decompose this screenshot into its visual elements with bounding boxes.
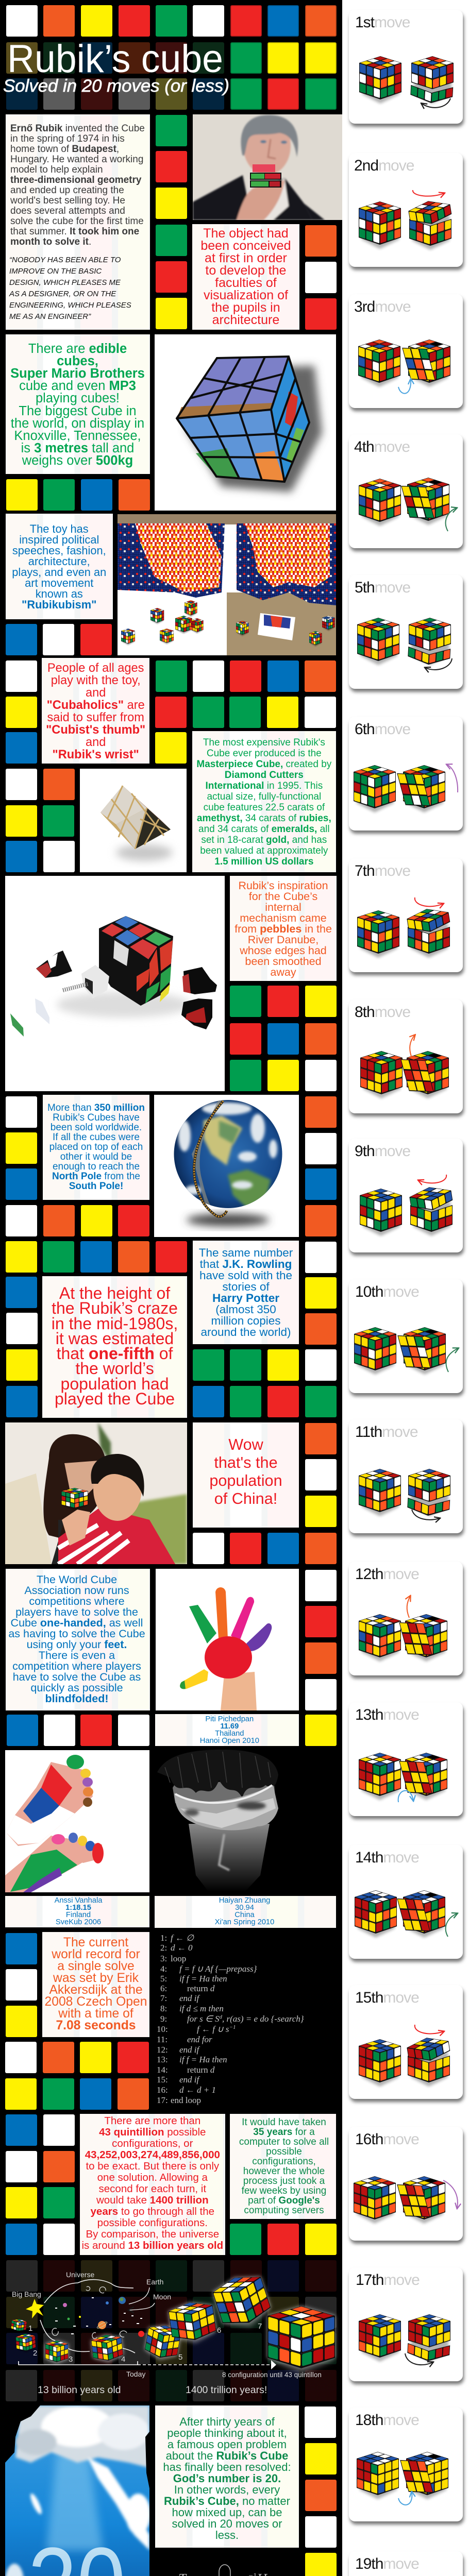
panel: 35 years of computing: computer to solve all	[239, 2137, 329, 2147]
algorithm pseudocode: 16:	[157, 2085, 168, 2095]
card: 3rd move: 3rdmove	[354, 298, 411, 315]
panel: world record: a single solve	[57, 1959, 135, 1973]
text block: quote	[9, 256, 131, 321]
panel: God's number: Rubik’s Cube, no matter	[164, 2495, 290, 2507]
algorithm pseudocode	[157, 1933, 304, 2105]
panel: edible cubes: weighs over 500kg	[22, 453, 133, 468]
panel: 350 million sold: enough to reach the	[53, 1161, 140, 1172]
algorithm pseudocode: 13:	[157, 2055, 168, 2064]
panel: Rubikubism: known as	[36, 587, 83, 600]
panel: world record	[42, 1932, 149, 2037]
panel: 43 quintillion: possible configurations.	[97, 2217, 208, 2229]
card: 5th move	[349, 575, 463, 689]
panel: all ages: and	[86, 736, 106, 749]
card: 13th move: 13thmove	[355, 1706, 419, 1723]
panel: all ages	[42, 658, 149, 764]
panel: object conceived: faculties of	[215, 276, 277, 290]
panel: one-fifth played: At the height of	[59, 1284, 170, 1302]
panel: Rubikubism: plays, and even an	[12, 566, 106, 579]
algorithm pseudocode: 15:	[157, 2075, 168, 2084]
panel: Harry Potter comparison: The same number	[199, 1246, 293, 1259]
panel: object conceived: architecture	[212, 313, 279, 327]
text block: intro: in the spring of 1974 in his	[10, 133, 125, 144]
tile grid	[5, 5, 337, 2576]
photo: painted hand	[156, 1569, 299, 1710]
algorithm pseudocode: end for	[187, 2035, 212, 2044]
panel: masterpiece cube: Diamond Cutters	[225, 770, 304, 781]
panel: World Cube Association: players have to solve the	[15, 1606, 138, 1618]
panel: God's number: In other words, every	[174, 2483, 280, 2496]
panel: edible cubes: is 3 metres tall and	[21, 441, 134, 455]
panel: World Cube Association: have to solve the Cube as	[13, 1671, 141, 1683]
card: 9th move: 9thmove	[355, 1143, 410, 1160]
card: 12th move	[349, 1562, 463, 1675]
algorithm pseudocode: end if	[179, 2045, 200, 2055]
panel: Harry Potter comparison: stories of	[222, 1280, 270, 1293]
algorithm pseudocode: 8:	[160, 2004, 167, 2013]
panel: 43 quintillion: to be exact. But there is only	[86, 2160, 219, 2172]
panel: 35 years of computing: computing servers	[244, 2205, 324, 2216]
text block: intro: and ended up creating the	[10, 185, 124, 196]
panel: masterpiece cube: amethyst, 34 carats of rubies,	[197, 813, 331, 824]
panel: all ages: "Cubist's thumb"	[46, 723, 145, 737]
algorithm pseudocode: for s ∈ S	[187, 2014, 220, 2024]
panel: pebbles inspiration: from pebbles in the	[234, 922, 332, 935]
panel: 43 quintillion: By comparison, the universe	[86, 2228, 219, 2240]
panel: Harry Potter comparison	[193, 1241, 299, 1344]
panel: world record: Akkersdijk at the	[49, 1982, 143, 1997]
card: 17th move: 17thmove	[356, 2272, 420, 2289]
panel: World Cube Association: quickly as possible	[30, 1682, 123, 1694]
panel: one-fifth played: in the mid-1980s,	[52, 1314, 178, 1333]
panel: World Cube Association	[5, 1569, 149, 1710]
panel: edible cubes: The biggest Cube in	[19, 404, 137, 418]
panel: edible cubes: There are edible	[28, 342, 127, 356]
panel: masterpiece cube: and 34 carats of emeralds, all	[198, 824, 330, 835]
panel: God's number: God’s number is 20.	[173, 2472, 281, 2485]
algorithm pseudocode: d ← 0	[171, 1943, 193, 1953]
panel: 35 years of computing	[230, 2114, 336, 2219]
panel: Harry Potter comparison: (almost 350	[215, 1303, 276, 1316]
panel: World Cube Association: Association now runs	[24, 1584, 129, 1597]
panel: Harry Potter comparison: Harry Potter	[212, 1292, 279, 1304]
panel: 35 years of computing: It would have taken	[242, 2117, 326, 2128]
panel: edible cubes: Knoxville, Tennessee,	[14, 429, 141, 443]
algorithm pseudocode: 17:	[157, 2095, 168, 2105]
text block: intro: month to solve it.	[10, 236, 91, 247]
algorithm pseudocode: 12:	[157, 2045, 168, 2055]
panel: world record: was set by Erik	[53, 1971, 139, 1985]
panel: population of China: population	[209, 1472, 282, 1489]
panel: God's number: people thinking about it,	[167, 2427, 287, 2439]
caption: Haiyan Zhuang: China	[234, 1911, 255, 1919]
algorithm pseudocode: 2:	[160, 1943, 167, 1953]
panel: Rubikubism	[5, 514, 113, 619]
panel: pebbles inspiration	[230, 876, 337, 981]
timeline: universe age versus cube configurations: Moon	[153, 2293, 171, 2301]
text block: intro: world's best selling toy. He	[10, 195, 125, 206]
timeline: universe age versus cube configurations: 2	[33, 2349, 37, 2358]
panel: 350 million sold: North Pole from the	[52, 1171, 140, 1182]
text block: intro: Hungary. He wanted a working	[10, 154, 143, 165]
panel: population of China	[193, 1422, 299, 1528]
card: 17th move	[349, 2267, 463, 2381]
photo: blindfolded man	[157, 1750, 278, 1888]
panel: pebbles inspiration: River Danube,	[248, 934, 319, 946]
panel: object conceived: to develop the	[205, 263, 286, 278]
panel: 350 million sold: South Pole!	[69, 1181, 123, 1192]
text block: quote: “NOBODY HAS BEEN ABLE TO	[9, 256, 121, 264]
card: 18th move	[349, 2408, 463, 2521]
panel: pebbles inspiration: been smoothed	[245, 955, 322, 968]
panel: object conceived: The object had	[203, 226, 289, 241]
panel: 350 million sold: More than 350 million	[47, 1103, 145, 1113]
card: 8th move	[349, 999, 463, 1113]
timeline: universe age versus cube configurations: 1400 trillion years!	[186, 2384, 267, 2396]
panel: masterpiece cube: cube features 22.5 carats of	[204, 802, 325, 813]
panel: 43 quintillion: 43 quintillion possible	[99, 2126, 206, 2138]
timeline: universe age versus cube configurations: 8 configuration until 43 quintillon	[222, 2371, 322, 2379]
algorithm pseudocode: if d ≤ m then	[179, 2004, 224, 2013]
algorithm pseudocode: 5:	[160, 1974, 167, 1984]
card: 4th move	[349, 434, 463, 548]
text block: quote: AS A DESIGNER, OR ON THE	[9, 290, 116, 298]
algorithm pseudocode: 9:	[160, 2014, 167, 2024]
panel: masterpiece cube: actual size, fully-functional	[207, 791, 321, 802]
panel: 35 years of computing: configurations,	[252, 2156, 316, 2167]
card: 2nd move: 2ndmove	[354, 157, 414, 174]
panel: God's number: a famous open problem	[167, 2438, 287, 2451]
panel: 43 quintillion: configurations, or	[112, 2138, 193, 2149]
caption: Haiyan Zhuang: Xi'an Spring 2010	[215, 1918, 274, 1926]
panel: one-fifth played	[42, 1276, 187, 1418]
card: 16th move: 16thmove	[355, 2131, 419, 2148]
panel: God's number: After thirty years of	[179, 2415, 275, 2428]
caption: Anssi Vanhala	[5, 1896, 149, 1927]
panel: pebbles inspiration: whose edges had	[240, 944, 327, 956]
text block: intro: does several attempts and	[10, 206, 125, 216]
algorithm pseudocode: , r(as) = e do {-search}	[222, 2014, 304, 2024]
panel: one-fifth played: the Rubik’s craze	[52, 1299, 178, 1317]
panel: pebbles inspiration: for the Cube’s	[249, 890, 317, 903]
card: 10th move: 10thmove	[355, 1283, 419, 1300]
card: 16th move	[349, 2127, 463, 2241]
panel: 350 million sold: If all the cubes were	[53, 1132, 140, 1143]
panel: masterpiece cube: set in 18-carat gold, and has	[201, 835, 327, 845]
timeline: universe age versus cube configurations: Earth	[146, 2278, 163, 2286]
text block: intro: that summer. It took him one	[10, 226, 139, 237]
card: 14th move	[349, 1845, 463, 1959]
panel: masterpiece cube	[192, 731, 336, 872]
panel: world record: 2008 Czech Open	[44, 1995, 147, 2008]
panel: 35 years of computing: process just took a	[243, 2176, 325, 2187]
panel: God's number	[155, 2405, 299, 2548]
text block: quote: IMPROVE ON THE BASIC	[9, 267, 102, 276]
card: 12th move: 12thmove	[355, 1566, 419, 1583]
panel: Harry Potter comparison: around the world)	[200, 1326, 291, 1338]
panel: all ages: "Cubaholics" are	[47, 699, 145, 712]
panel: 35 years of computing: part of Google's	[248, 2195, 320, 2206]
timeline: universe age versus cube configurations: 4	[121, 2355, 125, 2364]
algorithm pseudocode: d	[220, 2014, 223, 2020]
card: 7th move: 7thmove	[355, 862, 410, 879]
timeline: universe age versus cube configurations	[11, 2270, 335, 2396]
panel: one-fifth played: played the Cube	[55, 1389, 175, 1408]
panel: Erno Rubik intro	[5, 114, 149, 330]
panel: one-fifth played: that one-fifth of	[57, 1344, 173, 1363]
card: 1st move	[349, 10, 463, 124]
text block: intro: home town of Budapest,	[10, 144, 119, 155]
black left column background	[0, 0, 342, 2576]
timeline: universe age versus cube configurations: Big Bang	[12, 2290, 41, 2298]
panel: world record: world record for	[52, 1947, 140, 1961]
card: 11th move: 11thmove	[355, 1423, 418, 1440]
photo: clouds with large number 20	[5, 2405, 149, 2576]
photo: Super Mario cube	[155, 334, 336, 511]
timeline: universe age versus cube configurations: 3	[69, 2355, 73, 2364]
caption: Piti Pichedpan: Hanoi Open 2010	[200, 1737, 259, 1745]
panel: Rubikubism: art movement	[25, 577, 93, 589]
panel: 43 quintillion: one solution. Allowing a	[97, 2172, 208, 2183]
card: 9th move	[349, 1139, 463, 1252]
panel: one-fifth played: population had	[61, 1375, 169, 1393]
panel: world record: The current	[63, 1935, 128, 1950]
panel: one-fifth played: it was estimated	[56, 1329, 174, 1348]
panel: Harry Potter comparison: that J.K. Rowling	[200, 1258, 292, 1270]
panel: God's number: about the Rubik’s Cube	[166, 2449, 288, 2462]
panel: masterpiece cube: 1.5 million US dollars	[214, 856, 313, 867]
caption: Anssi Vanhala: SveKub 2006	[56, 1918, 101, 1926]
panel: 43 quintillion: is around 13 billion years old	[81, 2240, 223, 2251]
card: 5th move: 5thmove	[355, 579, 410, 596]
panel: 35 years of computing: however the whole	[243, 2166, 325, 2177]
algorithm pseudocode: 1:	[160, 1933, 167, 1943]
panel: World Cube Association: There is even a	[39, 1649, 115, 1662]
panel: masterpiece cube: International in 1995. This	[205, 781, 323, 791]
card: 6th move	[349, 717, 463, 831]
panel: Rubikubism: speeches, fashion,	[12, 544, 106, 557]
card: 18th move: 18thmove	[355, 2412, 419, 2429]
panel: God's number: solved in 20 moves or	[172, 2517, 282, 2530]
algorithm pseudocode: 11:	[157, 2035, 167, 2044]
caption: Anssi Vanhala: Anssi Vanhala	[55, 1896, 102, 1905]
algorithm pseudocode: −1	[229, 2024, 236, 2030]
timeline: universe age versus cube configurations: Universe	[66, 2270, 94, 2279]
algorithm pseudocode: f ← ∅	[171, 1933, 194, 1943]
algorithm pseudocode: if f = Ha then	[179, 1974, 227, 1984]
formula	[178, 2565, 280, 2576]
panel: pebbles inspiration: Rubik’s inspiration	[238, 879, 328, 891]
panel: edible cubes: playing cubes!	[36, 391, 120, 405]
panel: population of China: that's the	[214, 1454, 278, 1471]
panel: object conceived	[192, 224, 299, 330]
panel: 43 quintillion	[80, 2114, 225, 2255]
caption: Anssi Vanhala: Finland	[66, 1911, 91, 1919]
card: 19th move	[349, 2551, 463, 2576]
panel: God's number: less.	[215, 2529, 239, 2541]
timeline: universe age versus cube configurations: 6	[217, 2326, 221, 2335]
panel: masterpiece cube: Masterpiece Cube, created by	[196, 759, 331, 770]
panel: pebbles inspiration: mechanism came	[240, 912, 327, 924]
panel: 350 million sold: other it would be	[60, 1151, 132, 1162]
panel: object conceived: visualization of	[204, 288, 288, 302]
algorithm pseudocode: 3:	[160, 1954, 167, 1963]
algorithm pseudocode: end if	[179, 1993, 200, 2003]
photo: exploded cube mechanism	[5, 876, 225, 1091]
card: 1st move: 1stmove	[355, 14, 410, 31]
text block: intro: three-dimensional geometry	[10, 175, 141, 185]
algorithm pseudocode: f ← f ∪ s	[197, 2024, 229, 2034]
panel: all ages: said to suffer from	[47, 711, 144, 724]
card: 13th move	[349, 1702, 463, 1816]
panel: Rubikubism: architecture,	[28, 555, 90, 568]
panel: 43 quintillion: would take 1400 trillion	[96, 2194, 209, 2206]
title: Rubik’s cube	[7, 37, 223, 81]
timeline: universe age versus cube configurations: 5	[178, 2353, 182, 2362]
card: 15th move	[349, 1985, 463, 2099]
algorithm pseudocode: 14:	[157, 2065, 168, 2075]
panel: 350 million sold: Rubik’s Cubes have	[53, 1112, 140, 1123]
panel: Rubikubism: "Rubikubism"	[22, 598, 96, 611]
algorithm pseudocode: end loop	[171, 2095, 201, 2105]
panel: all ages: "Rubik's wrist"	[53, 748, 139, 761]
text block: intro	[10, 123, 145, 247]
photo: diamond masterpiece cube	[80, 769, 187, 872]
panel: masterpiece cube: The most expensive Rubik's	[203, 737, 325, 748]
algorithm pseudocode: loop	[171, 1954, 186, 1963]
panel: World Cube Association: The World Cube	[37, 1573, 117, 1586]
card: 2nd move	[349, 153, 463, 267]
caption: Haiyan Zhuang: 30.94	[235, 1904, 254, 1912]
panel: pebbles inspiration: away	[270, 965, 296, 978]
panel: all ages: and	[86, 686, 106, 700]
timeline: universe age versus cube configurations: 7	[258, 2322, 262, 2331]
photo: Erno Rubik holding cube	[193, 114, 342, 220]
panel: masterpiece cube: been valued at approximately	[200, 845, 328, 856]
panel: edible cubes: cube and even MP3	[19, 379, 136, 393]
algorithm pseudocode: 10:	[157, 2024, 168, 2034]
panel: world record: with a time of	[58, 2006, 133, 2021]
caption: Piti Pichedpan: Piti Pichedpan	[205, 1715, 254, 1723]
panel: all ages: play with the toy,	[51, 674, 141, 687]
panel: 43 quintillion: 43,252,003,274,489,856,000	[85, 2149, 220, 2161]
algorithm pseudocode: return d	[187, 2065, 215, 2075]
panel: edible cubes: cubes,	[57, 354, 98, 368]
panel: 43 quintillion: years to go through all the	[91, 2206, 214, 2217]
algorithm pseudocode: return d	[187, 1984, 215, 1993]
algorithm pseudocode: d ← d + 1	[179, 2085, 216, 2095]
timeline: universe age versus cube configurations: 13 billion years old	[38, 2384, 121, 2396]
photo: earth with stacked cubes	[154, 1095, 299, 1237]
photo: mother and child with cube	[5, 1422, 187, 1564]
panel: 350 million sold	[43, 1095, 149, 1200]
text block: quote: ENGINEERING, WHICH PLEASES	[9, 301, 131, 310]
photo: painted foot	[5, 1750, 149, 1892]
card: 4th move: 4thmove	[354, 438, 410, 455]
panel: Harry Potter comparison: have sold with the	[199, 1269, 292, 1282]
card: 10th move	[349, 1279, 463, 1393]
panel: object conceived: the pupils in	[211, 300, 280, 315]
panel: edible cubes: Super Mario Brothers	[10, 366, 145, 381]
panel: edible cubes	[5, 334, 149, 474]
text block: intro: solve the cube for the first time	[10, 216, 144, 227]
panel: all ages: People of all ages	[47, 662, 144, 675]
panel: World Cube Association: blindfolded!	[45, 1692, 108, 1705]
caption: Haiyan Zhuang: Haiyan Zhuang	[219, 1896, 270, 1905]
panel: 35 years of computing: few weeks by using	[242, 2185, 326, 2196]
panel: Rubikubism: The toy has	[30, 522, 89, 535]
caption: Piti Pichedpan	[155, 1714, 299, 1746]
card: 6th move: 6thmove	[355, 721, 410, 738]
panel: 43 quintillion: There are more than	[104, 2115, 200, 2127]
panel: masterpiece cube: Cube ever produced is the	[207, 748, 322, 759]
panel: God's number: has finally been resolved:	[163, 2461, 291, 2473]
panel: pebbles inspiration: internal	[265, 901, 301, 913]
panel: one-fifth played: the world’s	[75, 1359, 154, 1378]
algorithm pseudocode: 4:	[160, 1964, 167, 1974]
panel: World Cube Association: using only your feet.	[27, 1638, 127, 1651]
timeline: universe age versus cube configurations: 1	[28, 2324, 32, 2333]
photo: Rubik's cube mosaics	[118, 514, 336, 655]
card: 19th move: 19thmove	[355, 2555, 419, 2572]
timeline: universe age versus cube configurations: Today	[126, 2370, 145, 2378]
algorithm pseudocode: f = f ∪ Af {—prepass}	[179, 1964, 257, 1974]
algorithm pseudocode: if f = Ha then	[179, 2055, 227, 2064]
panel: 350 million sold: been sold worldwide.	[51, 1122, 142, 1133]
panel: edible cubes: the world, on display in	[11, 416, 144, 431]
caption: Piti Pichedpan: Thailand	[215, 1730, 244, 1738]
panel: World Cube Association: Cube one-handed, as well	[11, 1617, 143, 1629]
panel: Harry Potter comparison: million copies	[211, 1314, 281, 1327]
panel: object conceived: been conceived	[200, 239, 291, 253]
panel: World Cube Association: competitions where	[29, 1595, 125, 1607]
text block: intro: model to help explain	[10, 164, 103, 175]
panel: 35 years of computing: 35 years for a	[253, 2127, 315, 2138]
panel: 43 quintillion: second for each turn, it	[99, 2183, 206, 2195]
card: 7th move	[349, 858, 463, 972]
text block: quote: ME AS AN ENGINEER”	[9, 312, 91, 321]
panel: 350 million sold: placed on top of each	[49, 1142, 143, 1153]
algorithm pseudocode: 6:	[160, 1984, 167, 1993]
panel: 35 years of computing: possible	[266, 2146, 302, 2157]
text block: intro: Ernő Rubik invented the Cube	[10, 123, 145, 134]
subtitle: Solved in 20 moves (or less)	[3, 76, 229, 96]
card: 8th move: 8thmove	[355, 1004, 410, 1021]
panel: God's number: how mixed up, can be	[172, 2506, 282, 2519]
algorithm pseudocode: end if	[179, 2075, 200, 2084]
card: 15th move: 15thmove	[355, 1989, 419, 2006]
panel: object conceived: at first in order	[205, 251, 287, 265]
caption: Piti Pichedpan: 11.69	[220, 1722, 239, 1731]
panel: World Cube Association: as having to solve the Cube	[8, 1628, 145, 1640]
text block: quote: DESIGN, WHICH PLEASES ME	[9, 278, 121, 287]
panel: World Cube Association: competition where players	[12, 1660, 141, 1672]
card: 11th move	[349, 1419, 463, 1533]
panel: population of China: Wow	[228, 1436, 263, 1453]
caption: Anssi Vanhala: 1:18.15	[65, 1904, 91, 1912]
caption: Haiyan Zhuang	[155, 1896, 336, 1928]
card: 3rd move	[349, 294, 463, 408]
algorithm pseudocode: 7:	[160, 1993, 167, 2003]
panel: Rubikubism: inspired political	[19, 533, 99, 546]
panel: world record: 7.08 seconds	[56, 2019, 136, 2032]
card: 14th move: 14thmove	[355, 1849, 419, 1866]
panel: population of China: of China!	[214, 1490, 277, 1507]
